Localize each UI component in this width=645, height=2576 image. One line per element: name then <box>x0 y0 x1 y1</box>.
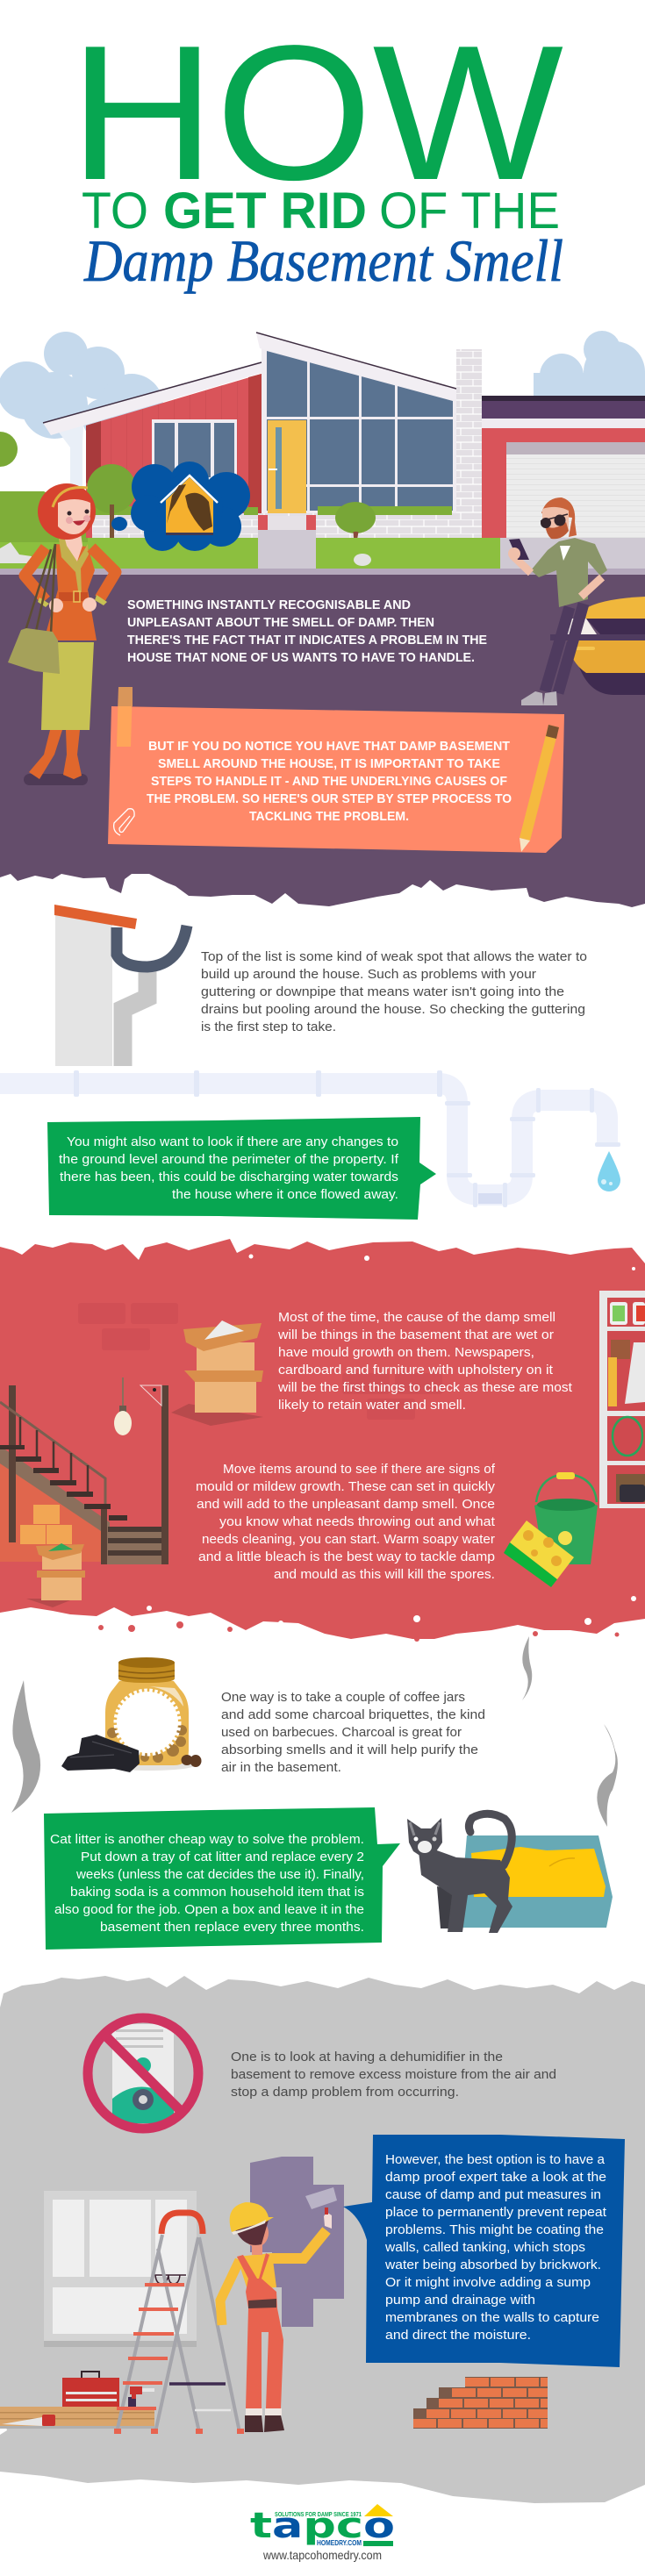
callout: damp proof expert <box>343 2135 625 2367</box>
title word: HOW: HOW <box>69 6 563 220</box>
logo: tapco: tapc o <box>250 2506 395 2546</box>
lawn and driveway <box>0 538 645 569</box>
title line: to get rid of the: OF THE <box>379 182 560 240</box>
icon: litter tray <box>459 1835 613 1928</box>
note text <box>147 739 512 824</box>
boots <box>29 730 62 779</box>
hedge left <box>0 491 97 544</box>
grey background with torn edges <box>0 1976 645 2503</box>
text: causes: will be things in the basement that are wet or <box>277 1327 554 1342</box>
door <box>268 420 306 516</box>
text: causes: likely to retain water and smell. <box>278 1398 466 1413</box>
website address: www.tapcohomedry.com <box>262 2548 382 2562</box>
loose beans <box>181 1755 193 1765</box>
callout: damp proof expert: and direct the moisture. <box>385 2328 531 2343</box>
text: charcoal: air in the basement. <box>221 1760 341 1775</box>
icon: damp house <box>161 476 218 535</box>
window <box>44 2191 197 2347</box>
title line: to get rid of the: TO <box>82 182 148 240</box>
note text: BUT IF YOU DO NOTICE YOU HAVE THAT DAMP BASEMENT <box>148 739 510 754</box>
text: dehumidifier: stop a damp problem from occurring. <box>231 2085 459 2100</box>
title <box>69 6 563 294</box>
callout: damp proof expert: Or it might involve adding a sump <box>385 2275 591 2290</box>
callout: damp proof expert: water being absorbed by brickwork. <box>384 2258 601 2272</box>
text: dehumidifier: One is to look at having a dehumidifier in the <box>231 2050 503 2064</box>
text: causes: will be the first things to check as these are most <box>277 1380 573 1395</box>
panel: guttering <box>0 905 620 1220</box>
left window <box>152 419 237 481</box>
pavement <box>0 569 645 576</box>
worker <box>220 2187 337 2432</box>
intro text: HOUSE THAT NONE OF US WANTS TO HAVE TO HANDLE. <box>127 650 475 665</box>
ladder <box>114 2213 244 2434</box>
garage wing <box>482 396 645 419</box>
callout: damp proof expert: problems. This might be coating the <box>385 2222 604 2237</box>
callout: damp proof expert: membranes on the walls to capture <box>385 2310 599 2325</box>
panel: basement contents <box>0 1239 645 1642</box>
purple wall patch <box>250 2157 344 2327</box>
large window <box>262 342 456 518</box>
staircase <box>0 1385 168 1564</box>
text: charcoal: and add some charcoal briquettes, the kind <box>221 1707 485 1722</box>
far legs <box>437 1886 453 1928</box>
callout: cat litter <box>44 1807 400 1950</box>
text: charcoal <box>221 1690 485 1775</box>
text: mould: needs cleaning, you can start. Warm soapy water <box>202 1532 495 1547</box>
tape <box>117 687 133 747</box>
bag <box>25 544 55 635</box>
text: dehumidifier <box>231 2050 556 2100</box>
head <box>541 497 577 537</box>
callout: ground level: the house where it once flowed away. <box>172 1187 398 1202</box>
glasses <box>154 2275 186 2284</box>
right roof <box>256 333 456 401</box>
note text: THE PROBLEM. SO HERE'S OUR STEP BY STEP PROCESS TO <box>147 791 512 806</box>
raised arm <box>270 2230 326 2258</box>
left roof <box>43 362 262 435</box>
callout: damp proof expert: cause of damp and put measures in <box>385 2187 601 2202</box>
text: mould: Move items around to see if there are signs of <box>223 1462 496 1477</box>
text: mould: mould or mildew growth. These can set in quickly <box>196 1479 496 1494</box>
text: dehumidifier: basement to remove excess moisture from the air and <box>231 2067 556 2082</box>
jar lid <box>118 1658 175 1683</box>
pencil <box>520 725 559 841</box>
callout: cat litter: Cat litter is another cheap way to solve the problem. <box>50 1832 364 1847</box>
title line: to get rid of the: GET RID <box>163 182 367 240</box>
text: mould: and a little bleach is the best way to tackle damp <box>198 1549 495 1564</box>
jacket <box>44 544 97 640</box>
paper clip <box>114 809 134 835</box>
plate <box>104 1760 195 1771</box>
text: mould: and will add to the unpleasant damp smell. Once <box>197 1497 495 1512</box>
faded wall bricks <box>78 1303 442 1420</box>
logo: tapco: SOLUTIONS FOR DAMP SINCE 1971 <box>275 2510 362 2518</box>
callout: cat litter: also good for the job. Open a box and leave it in the <box>54 1902 364 1917</box>
title line: to get rid of the <box>82 182 560 240</box>
logo: tapco: HOMEDRY.COM <box>317 2539 362 2547</box>
callout: ground level <box>47 1117 436 1220</box>
note text: SMELL AROUND THE HOUSE, IT IS IMPORTANT TO TAKE <box>158 756 500 771</box>
text: gutter: drains but pooling around the house. So checking the guttering <box>201 1002 585 1017</box>
body and legs <box>419 1850 512 1933</box>
lowered arm <box>220 2260 240 2325</box>
tree trunk left <box>54 412 84 491</box>
shirt <box>531 538 607 607</box>
woman character <box>8 483 116 785</box>
torn edge specks <box>23 1255 636 1642</box>
background trees <box>0 331 645 440</box>
icon: water drop <box>598 1151 620 1191</box>
arms <box>25 547 46 600</box>
car <box>585 597 645 619</box>
icon: bucket and sponge <box>504 1472 598 1587</box>
text: mould: and mould as this will kill the spores. <box>274 1567 495 1582</box>
intro text: THERE'S THE FACT THAT IT INDICATES A PROBLEM IN THE <box>127 633 487 648</box>
text: gutter: guttering or downpipe that means water isn't going into the <box>201 984 564 999</box>
panel: house scene and intro <box>0 331 645 907</box>
overalls <box>237 2253 283 2408</box>
thought bubble with damp house icon <box>111 462 250 551</box>
label <box>117 1692 178 1753</box>
icon: brick stack <box>413 2377 548 2429</box>
callout: ground level: You might also want to look if there are any changes to <box>67 1134 398 1149</box>
hair <box>38 483 96 540</box>
face <box>58 499 90 534</box>
callout: damp proof expert: walls, called tanking, which stops <box>384 2240 585 2255</box>
callout: cat litter: Put down a tray of cat litter and replace every 2 <box>81 1850 364 1864</box>
callout: ground level: there has been, this could be discharging water towards <box>60 1170 398 1184</box>
text: charcoal: absorbing smells and it will help purify the <box>221 1742 478 1757</box>
jar body <box>105 1681 189 1765</box>
text: gutter: build up around the house. Such as problems with your <box>201 967 536 982</box>
forearms <box>512 555 531 573</box>
coffee beans <box>107 1725 187 1763</box>
left wing wall <box>86 374 262 538</box>
trowel <box>305 2187 337 2209</box>
icon: wall and gutter <box>54 905 187 1066</box>
icon: cat <box>407 1814 512 1933</box>
text: causes <box>277 1310 573 1413</box>
icon: no dehumidifier <box>88 2018 198 2129</box>
note text: STEPS TO HANDLE IT - AND THE UNDERLYING CAUSES OF <box>151 774 507 789</box>
light bulb <box>114 1377 132 1435</box>
charcoal <box>61 1735 140 1772</box>
panel: dehumidifier and damp proofing <box>0 1976 645 2503</box>
icon: coffee jar and charcoal <box>61 1657 202 1772</box>
text: causes: have mould growth on them. Newspapers, <box>278 1345 534 1360</box>
man character with car <box>508 497 645 705</box>
note text: TACKLING THE PROBLEM. <box>249 809 409 824</box>
box stack two <box>26 1543 85 1607</box>
box stack one <box>171 1320 263 1426</box>
chimney and brick base <box>456 349 482 538</box>
callout: damp proof expert: pump and drainage with <box>385 2293 535 2308</box>
paper <box>108 706 564 853</box>
shoes <box>521 691 557 705</box>
intro text <box>127 597 487 665</box>
callout: damp proof expert: damp proof expert take a look at the <box>385 2170 606 2185</box>
purple panel with torn edge <box>0 575 645 907</box>
callout: cat litter: basement then replace every three months. <box>100 1920 364 1935</box>
callout: ground level: the ground level around the perimeter of the property. If <box>59 1152 399 1167</box>
callout: damp proof expert: However, the best option is to have a <box>385 2152 606 2167</box>
intro text: SOMETHING INSTANTLY RECOGNISABLE AND <box>127 597 411 612</box>
text: mould <box>196 1462 496 1582</box>
callout: damp proof expert: place to permanently prevent repeat <box>385 2205 607 2220</box>
toolbox <box>62 2372 119 2407</box>
porch <box>258 515 268 532</box>
boots <box>245 2415 284 2432</box>
drill <box>128 2386 154 2407</box>
callout: cat litter: weeks (unless the cat decides the use it). Finally, <box>75 1867 364 1882</box>
skirt <box>41 642 94 730</box>
house <box>43 333 645 540</box>
red background with torn edges <box>0 1239 645 1639</box>
head <box>252 2243 262 2255</box>
panel: absorbers <box>11 1636 618 1950</box>
smoke wisps <box>11 1636 618 1827</box>
title line: Damp Basement Smell: Damp Basement Smell <box>83 227 563 294</box>
cobweb <box>140 1385 161 1406</box>
text: gutter <box>201 949 587 1034</box>
storage shelf <box>599 1291 645 1508</box>
intro text: UNPLEASANT ABOUT THE SMELL OF DAMP. THEN <box>127 615 434 630</box>
text: mould: you know what needs throwing out and what <box>219 1514 496 1529</box>
callout: cat litter: baking soda is a common household item that is <box>70 1885 364 1900</box>
text: gutter: Top of the list is some kind of weak spot that allows the water to <box>201 949 587 964</box>
legs <box>545 604 584 693</box>
note card <box>108 687 564 853</box>
text: causes: cardboard and furniture with upholstery on it <box>278 1363 554 1377</box>
text: charcoal: One way is to take a couple of coffee jars <box>221 1690 465 1705</box>
yellow shirt <box>237 2253 276 2290</box>
text: causes: Most of the time, the cause of the damp smell <box>278 1310 555 1325</box>
icon: water pipe <box>0 1070 620 1207</box>
tail <box>469 1814 512 1865</box>
boxes under stairs <box>20 1505 72 1544</box>
text: charcoal: used on barbecues. Charcoal is great for <box>221 1725 462 1740</box>
text: gutter: is the first step to take. <box>201 1020 336 1034</box>
shadow <box>24 774 88 785</box>
wood planks and saw <box>0 2407 154 2429</box>
flower beds and shrubs <box>87 464 452 542</box>
phone <box>509 539 529 560</box>
head <box>407 1818 442 1858</box>
